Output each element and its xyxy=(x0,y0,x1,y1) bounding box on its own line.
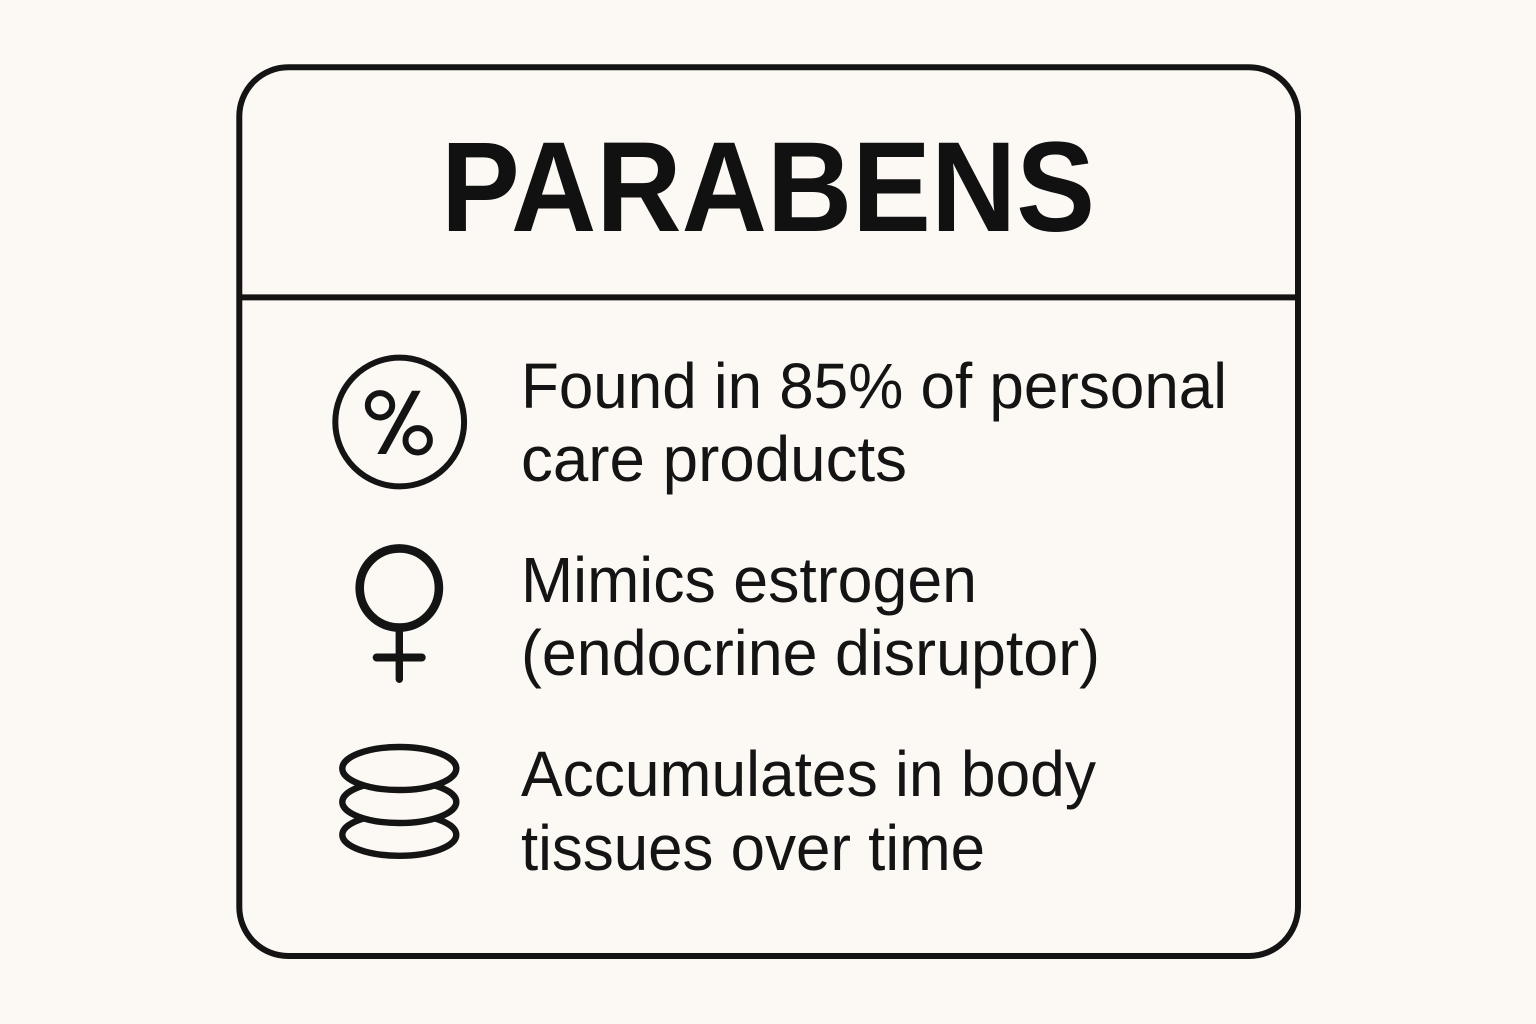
text: mimics estrogen: Mimics estrogen xyxy=(521,544,977,616)
icon: percent in circle xyxy=(335,358,464,486)
panel: parabens card xyxy=(239,67,1298,956)
text: accumulates: tissues over time xyxy=(521,812,985,884)
text: found in 85%: Found in 85% of personal xyxy=(521,350,1227,422)
text: found in 85%: care products xyxy=(521,423,907,495)
text: found in 85% xyxy=(521,350,1227,495)
text: mimics estrogen: (endocrine disruptor) xyxy=(521,617,1100,689)
text: accumulates: Accumulates in body xyxy=(521,738,1096,810)
icon: female symbol xyxy=(360,548,439,679)
text: mimics estrogen xyxy=(521,544,1100,689)
title: PARABENS xyxy=(441,116,1095,259)
icon: stacked layers xyxy=(342,747,456,856)
text: accumulates xyxy=(521,738,1096,884)
